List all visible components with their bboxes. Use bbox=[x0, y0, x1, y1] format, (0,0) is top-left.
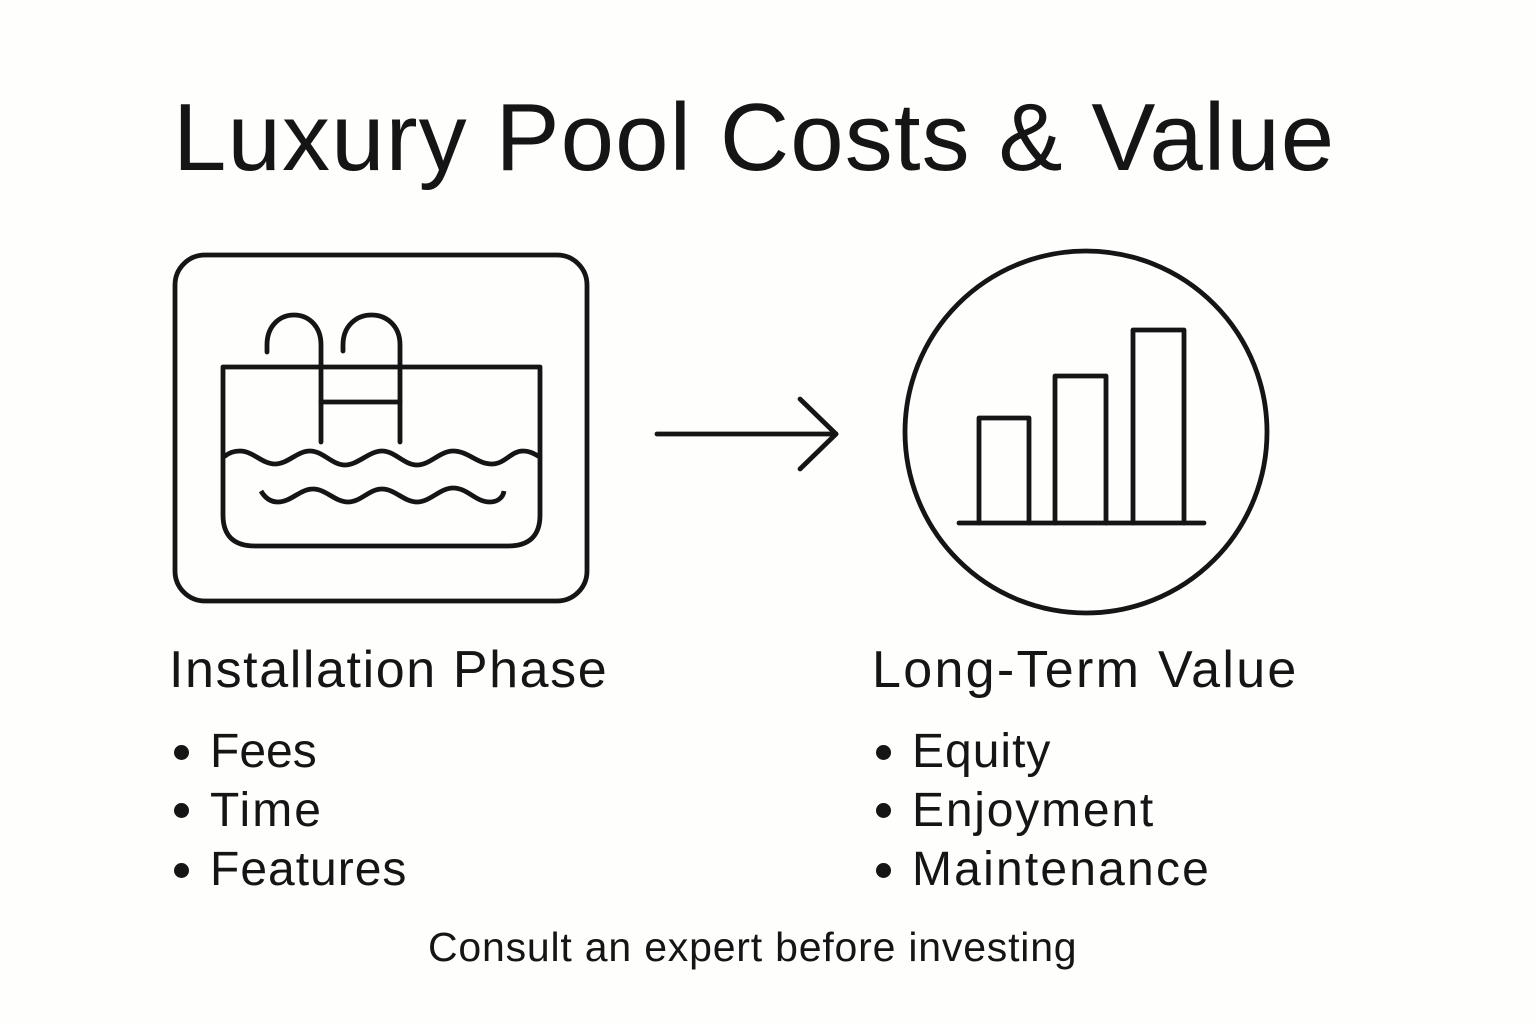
bullet bbox=[876, 745, 891, 760]
bullet bbox=[174, 745, 189, 760]
item: fees: Fees bbox=[210, 725, 317, 778]
icon: bar chart in circle bbox=[905, 251, 1267, 613]
arrow bbox=[657, 399, 836, 469]
list: installation items bbox=[174, 725, 407, 896]
item: features: Features bbox=[210, 843, 407, 896]
icon: swimming pool bbox=[175, 255, 587, 601]
bullet bbox=[876, 863, 891, 878]
item: enjoyment: Enjoyment bbox=[912, 784, 1155, 837]
heading: installation phase: Installation Phase bbox=[169, 641, 608, 699]
bullet bbox=[174, 863, 189, 878]
bullet bbox=[876, 803, 891, 818]
heading: long-term value: Long-Term Value bbox=[872, 641, 1299, 699]
item: maintenance: Maintenance bbox=[912, 843, 1211, 896]
title: Luxury Pool Costs & Value bbox=[173, 84, 1335, 191]
bullet bbox=[174, 803, 189, 818]
item: time: Time bbox=[210, 784, 323, 837]
item: equity: Equity bbox=[912, 725, 1051, 778]
footer note: Consult an expert before investing bbox=[428, 924, 1077, 970]
list: value items bbox=[876, 725, 1211, 896]
